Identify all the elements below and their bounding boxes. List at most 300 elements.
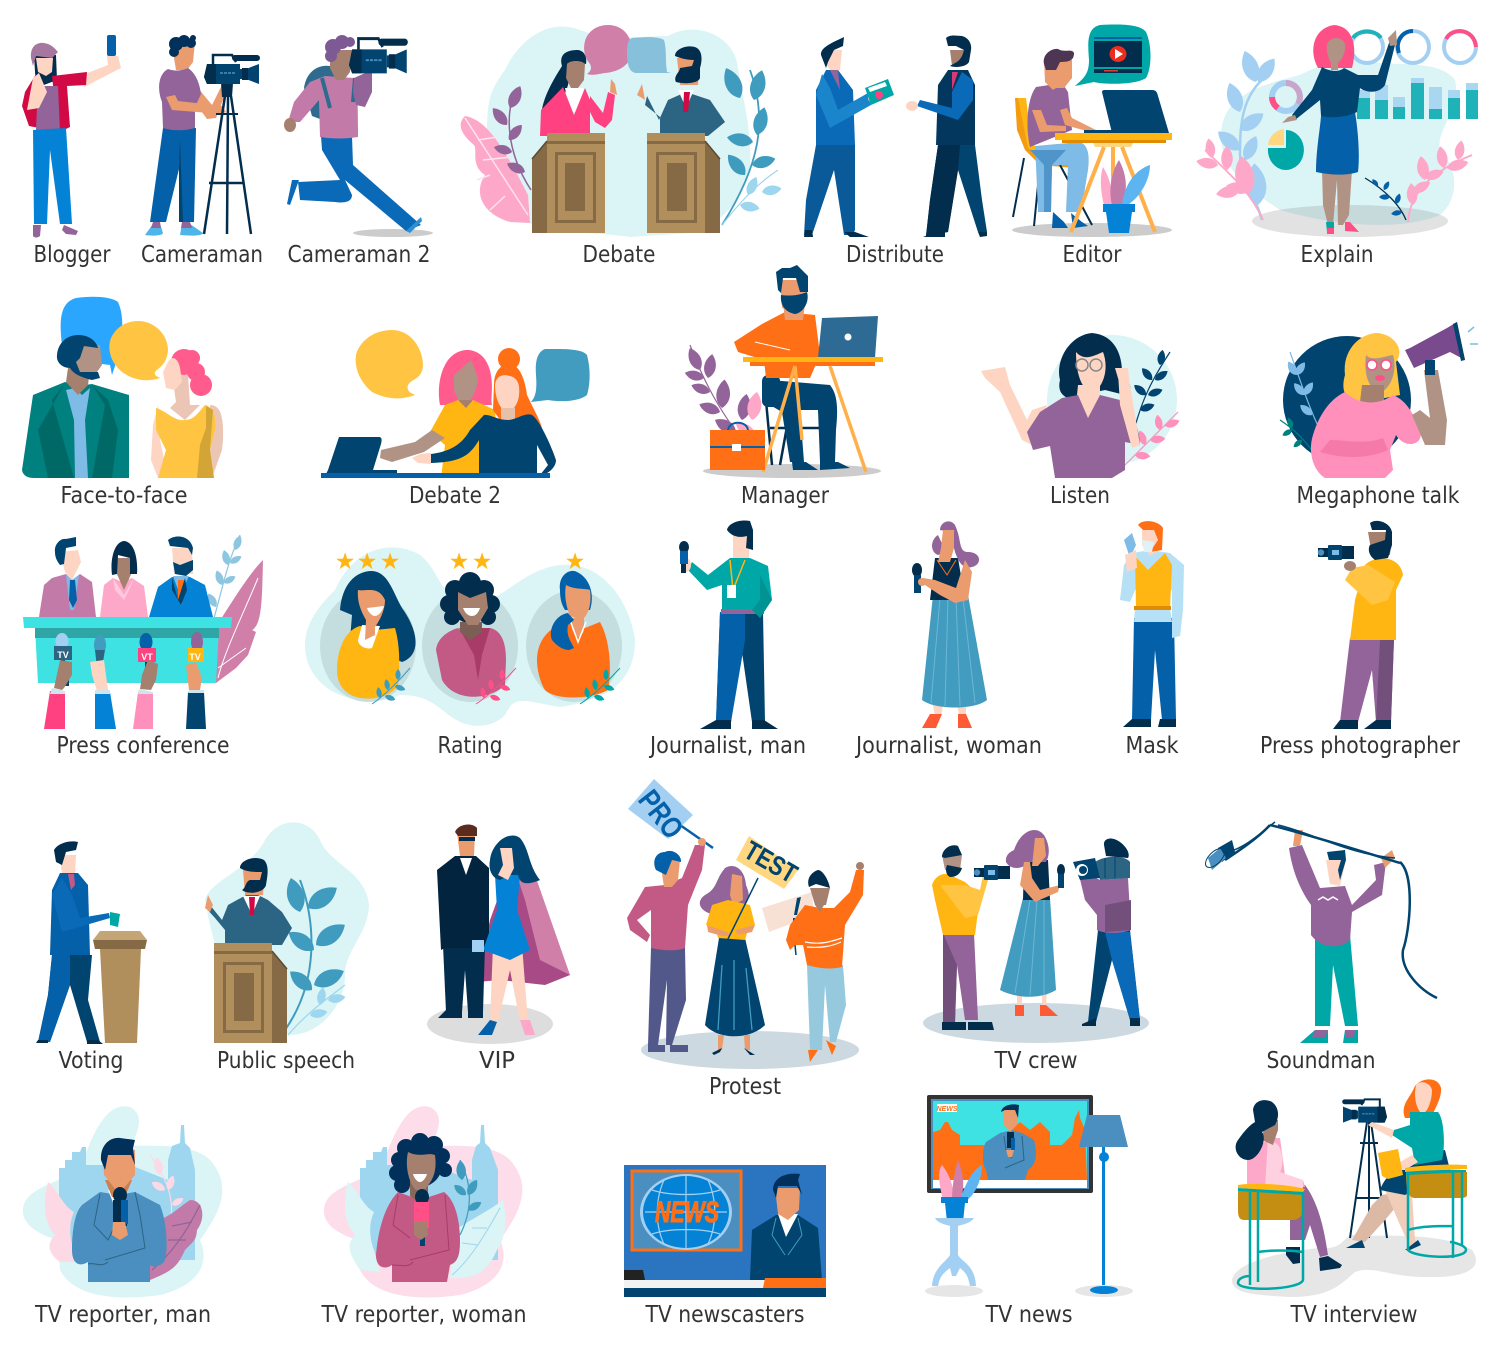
shirt bottom xyxy=(1134,608,1172,622)
navy sprig xyxy=(1365,178,1406,220)
shoes xyxy=(478,1020,497,1035)
video camera xyxy=(1073,857,1130,880)
shoes xyxy=(1052,212,1088,228)
face xyxy=(498,848,514,880)
head xyxy=(1044,60,1072,90)
woman xyxy=(100,541,148,617)
hair xyxy=(325,35,355,62)
pink sprig left xyxy=(1195,138,1263,220)
face xyxy=(1365,355,1395,392)
hair and beard xyxy=(57,335,100,380)
arms xyxy=(151,405,168,478)
label: Cameraman 2 xyxy=(288,242,430,268)
face xyxy=(1076,352,1106,392)
desk xyxy=(743,357,883,362)
raised arm xyxy=(1412,370,1447,445)
legs xyxy=(718,1035,750,1050)
mask xyxy=(1142,540,1154,552)
blob xyxy=(324,1106,522,1297)
label: Explain xyxy=(1300,242,1374,268)
bag xyxy=(472,940,484,952)
neck xyxy=(66,368,90,395)
podium right xyxy=(647,133,720,233)
man 1 pants xyxy=(804,145,855,235)
aqua circle xyxy=(1047,335,1177,465)
label: Debate xyxy=(582,242,656,268)
mic TV left: TV xyxy=(57,650,69,660)
tv frame xyxy=(927,1095,1093,1193)
sprig 2 xyxy=(476,668,516,704)
left woman head xyxy=(1262,1120,1278,1145)
jeans xyxy=(1035,142,1089,212)
floor shadow xyxy=(1232,1235,1476,1297)
boom pole xyxy=(1225,822,1437,998)
plant xyxy=(1101,167,1113,205)
panel: TV news xyxy=(925,1095,1133,1297)
shirt xyxy=(288,76,358,138)
top xyxy=(930,558,965,600)
table shadow xyxy=(925,1285,983,1297)
person 2 top xyxy=(706,900,755,940)
arm xyxy=(1020,862,1060,902)
right woman legs xyxy=(1352,1190,1410,1242)
hair xyxy=(1343,333,1400,402)
panel: Blogger xyxy=(22,35,121,238)
glasses xyxy=(1367,360,1391,370)
raised arm xyxy=(353,70,372,107)
arm to camera xyxy=(196,85,226,119)
desk xyxy=(624,1280,826,1288)
shoes xyxy=(922,714,972,728)
head xyxy=(1368,532,1392,555)
sprig 1 xyxy=(372,668,410,704)
pink hair xyxy=(439,350,492,405)
shadow xyxy=(923,1003,1149,1043)
navy top xyxy=(431,414,556,475)
skirt xyxy=(1000,898,1056,997)
man xyxy=(637,46,725,136)
belt xyxy=(1134,606,1171,610)
skirt xyxy=(922,595,987,708)
video screen xyxy=(1094,41,1142,67)
shadow xyxy=(1012,223,1172,237)
blob xyxy=(1221,60,1456,225)
raised arm xyxy=(80,56,121,87)
pink top xyxy=(1247,1138,1305,1187)
afro xyxy=(389,1133,452,1193)
arm xyxy=(52,878,110,932)
pants xyxy=(150,128,196,222)
pie chart xyxy=(1268,129,1304,170)
legs xyxy=(932,700,966,716)
lamp pole xyxy=(1102,1147,1105,1287)
person 2 hair xyxy=(700,866,749,915)
person 3 pants xyxy=(1088,930,1140,1022)
teal sprig xyxy=(283,876,350,1030)
shirt and tie xyxy=(243,896,260,915)
person 1 shirt xyxy=(627,845,705,950)
crossed arm xyxy=(1320,438,1388,457)
pants xyxy=(33,128,72,224)
woman legs xyxy=(490,945,528,1022)
forearm xyxy=(166,95,226,114)
man jacket xyxy=(437,856,489,950)
teal bubble xyxy=(531,349,590,402)
woman 3 hair xyxy=(560,571,592,610)
shirt xyxy=(1120,550,1184,638)
head xyxy=(70,345,102,372)
label: Soundman xyxy=(1266,1048,1376,1074)
shoes xyxy=(33,225,78,238)
panel: TV interview xyxy=(1232,1079,1476,1297)
woman 3 body xyxy=(537,622,610,698)
hand xyxy=(906,101,918,111)
lapel lines xyxy=(392,1195,449,1266)
face xyxy=(495,375,519,412)
label: Protest xyxy=(709,1074,781,1100)
hair xyxy=(1059,333,1131,398)
neck xyxy=(1360,385,1384,410)
stick xyxy=(680,825,713,848)
navy sprig xyxy=(1132,349,1170,440)
mic xyxy=(679,541,689,573)
label: Debate 2 xyxy=(409,483,501,509)
label: TV interview xyxy=(1290,1302,1418,1328)
sprig xyxy=(205,534,244,618)
person 3 shirt xyxy=(786,870,864,968)
mouth xyxy=(1375,375,1385,381)
label: Listen xyxy=(1050,483,1110,509)
jacket xyxy=(816,70,855,145)
hand xyxy=(205,895,213,912)
skirt xyxy=(1316,112,1359,175)
lanyard and badge xyxy=(727,560,745,598)
pants xyxy=(1132,618,1176,720)
person 1 pants xyxy=(648,948,686,1045)
city xyxy=(360,1125,498,1260)
stars: ★ xyxy=(565,549,585,575)
pot xyxy=(941,1197,968,1222)
woman top xyxy=(1023,860,1050,900)
hair xyxy=(171,349,212,396)
head xyxy=(243,870,265,895)
panel: Cameraman xyxy=(145,35,260,236)
screen xyxy=(933,1101,1087,1181)
stars: ★ xyxy=(449,549,469,575)
mic TV right xyxy=(188,632,204,662)
panel: Protest xyxy=(627,779,864,1069)
hand xyxy=(868,93,880,103)
purple sprig xyxy=(489,84,531,190)
stars: ★ xyxy=(335,549,355,575)
shadow xyxy=(1252,205,1448,237)
camera xyxy=(349,39,408,73)
shoes xyxy=(145,224,203,236)
top xyxy=(688,558,772,615)
panel: Rating xyxy=(305,547,635,726)
big leaf xyxy=(214,560,263,683)
purple sprig xyxy=(684,345,753,440)
shadow xyxy=(703,464,881,478)
right arm xyxy=(1118,372,1140,448)
man pants xyxy=(443,945,485,1012)
person 3 pants xyxy=(807,965,846,1050)
lamp shadow xyxy=(1075,1285,1133,1297)
podium xyxy=(214,943,287,1043)
plant xyxy=(939,1160,982,1202)
blob xyxy=(23,1106,222,1297)
label: Megaphone talk xyxy=(1296,483,1460,509)
shirt xyxy=(460,858,472,875)
label: Editor xyxy=(1062,242,1122,268)
shoes xyxy=(1015,1005,1058,1016)
pants xyxy=(298,136,421,231)
top xyxy=(1027,395,1140,478)
orange top xyxy=(734,312,820,378)
panel: Press photographer xyxy=(1318,521,1403,729)
bar chart xyxy=(1357,78,1478,119)
shoes xyxy=(700,720,778,729)
stick xyxy=(725,878,758,945)
face xyxy=(330,50,352,80)
head xyxy=(775,1188,800,1220)
shoes xyxy=(942,1022,994,1030)
mic xyxy=(113,1187,128,1226)
blank sign xyxy=(762,892,814,932)
desk legs xyxy=(763,366,866,472)
yellow shirt xyxy=(430,400,500,478)
jacket xyxy=(22,382,129,478)
pants xyxy=(770,380,837,462)
tie xyxy=(952,72,958,90)
pink sprig xyxy=(150,1155,185,1225)
woman 1 body xyxy=(337,626,399,699)
person 1 pants xyxy=(943,933,978,1023)
label: Voting xyxy=(58,1048,124,1074)
hand xyxy=(1344,561,1356,571)
jacket xyxy=(50,873,90,955)
desk legs xyxy=(1071,147,1155,232)
hair xyxy=(101,1138,135,1170)
microphone xyxy=(1202,840,1235,871)
panel: Distribute xyxy=(804,36,987,237)
pink leaf xyxy=(461,116,530,223)
arm xyxy=(1345,565,1395,605)
woman 1 hair xyxy=(340,571,416,662)
belt xyxy=(721,609,764,614)
blob xyxy=(305,547,635,726)
hair xyxy=(169,35,196,57)
brown arm xyxy=(380,430,445,462)
woman legs xyxy=(1017,990,1047,1008)
head xyxy=(59,855,76,873)
yellow bubble xyxy=(356,330,423,398)
face xyxy=(407,1152,436,1190)
neck xyxy=(170,375,200,420)
shoes xyxy=(1123,719,1176,727)
man 2 pants xyxy=(926,145,987,236)
shadow xyxy=(353,229,433,237)
orange city xyxy=(933,1110,1087,1180)
panel: Megaphone talk xyxy=(1280,322,1478,478)
hand xyxy=(412,453,431,464)
head xyxy=(173,42,195,70)
person 3 shirt xyxy=(1079,875,1131,933)
shoes xyxy=(1346,1240,1421,1250)
label: Rating xyxy=(438,733,502,759)
desk xyxy=(321,473,550,478)
NEWS text: NEWS xyxy=(655,1196,719,1229)
head xyxy=(942,855,962,870)
panel: Journalist, man xyxy=(679,521,778,729)
vest xyxy=(936,70,975,145)
cuffs xyxy=(50,688,204,694)
neck xyxy=(783,303,805,320)
blob xyxy=(487,26,750,237)
shirt xyxy=(778,1214,798,1237)
label: Manager xyxy=(741,483,829,509)
table shade xyxy=(35,628,219,638)
arms xyxy=(1293,830,1395,868)
sweater xyxy=(1289,845,1386,946)
ellipses xyxy=(320,590,416,702)
podium left xyxy=(532,133,605,233)
hair xyxy=(932,521,979,568)
globe xyxy=(640,1174,732,1250)
chair xyxy=(765,390,820,465)
label: Journalist, man xyxy=(648,733,806,759)
left arm xyxy=(27,73,47,110)
woman 3 ponytail xyxy=(551,613,574,650)
mic xyxy=(414,1189,429,1246)
panel: TV reporter, man xyxy=(23,1106,222,1297)
hand and mic xyxy=(912,563,926,593)
suit xyxy=(376,1192,460,1282)
woman 2 afro xyxy=(440,572,500,625)
clipboard xyxy=(1378,1149,1403,1179)
pants xyxy=(38,955,100,1042)
camera xyxy=(1318,545,1354,560)
right chair frame xyxy=(1405,1165,1467,1258)
panel: Manager xyxy=(684,265,883,478)
shirt xyxy=(159,68,201,130)
megaphone xyxy=(1405,322,1478,375)
label: Public speech xyxy=(217,1048,355,1074)
stars xyxy=(335,549,585,575)
TEST sign: TEST xyxy=(739,835,803,889)
label: Face-to-face xyxy=(60,483,188,509)
backpack xyxy=(304,66,336,122)
panel: TV reporter, woman xyxy=(324,1106,522,1297)
man 1 xyxy=(39,537,96,617)
left woman hair xyxy=(1236,1100,1278,1160)
paper xyxy=(110,912,120,927)
cable xyxy=(1400,862,1437,998)
necklace xyxy=(937,560,956,575)
label: Blogger xyxy=(34,242,111,268)
person 1 head xyxy=(660,860,680,887)
pants xyxy=(1340,638,1394,722)
panel: Editor xyxy=(1012,25,1172,237)
logo xyxy=(1318,897,1338,900)
person 2 face xyxy=(730,874,743,905)
panel: Public speech xyxy=(205,822,369,1043)
pink leaf left xyxy=(45,1182,80,1262)
shoes xyxy=(648,1045,688,1052)
briefcase xyxy=(710,423,765,470)
camera xyxy=(204,55,260,84)
donut xyxy=(1272,83,1300,111)
beard xyxy=(781,292,808,314)
side table xyxy=(932,1218,976,1286)
teal sprig xyxy=(719,65,777,225)
pants xyxy=(716,612,765,722)
shirt xyxy=(66,388,90,478)
label: TV crew xyxy=(994,1048,1078,1074)
label: Journalist, woman xyxy=(854,733,1042,759)
cape xyxy=(477,865,570,985)
shirt xyxy=(36,86,60,132)
laptop xyxy=(1102,90,1169,133)
shoes xyxy=(804,230,869,237)
pot xyxy=(1103,204,1135,233)
blue bubble xyxy=(627,37,671,73)
monitor xyxy=(624,1270,645,1280)
hood and hoodie xyxy=(1350,558,1403,640)
panel: Voting xyxy=(36,841,147,1044)
news tag: NEWS xyxy=(936,1106,958,1113)
lamp shade xyxy=(1079,1115,1128,1147)
studio wall xyxy=(624,1165,826,1297)
panel: Explain xyxy=(1195,25,1478,237)
panel: Face-to-face xyxy=(22,297,223,478)
panel: Journalist, woman xyxy=(912,521,987,728)
label: TV reporter, woman xyxy=(321,1302,526,1328)
hands xyxy=(1282,30,1397,123)
tripod xyxy=(1350,1122,1387,1238)
person 3 head xyxy=(810,888,830,912)
lamp base xyxy=(1090,1286,1118,1294)
mic xyxy=(1057,864,1065,888)
sleeves xyxy=(44,691,65,729)
person 2 skirt xyxy=(705,938,765,1036)
city xyxy=(59,1125,195,1260)
hat xyxy=(31,43,58,66)
hair xyxy=(1006,830,1049,868)
phone xyxy=(107,35,116,56)
panel: Listen xyxy=(981,333,1181,478)
head xyxy=(103,1150,135,1190)
neck and face xyxy=(1327,38,1345,70)
panel: Cameraman 2 xyxy=(284,35,433,237)
right arm xyxy=(1368,1122,1394,1138)
suit xyxy=(750,1215,822,1280)
lapel lines xyxy=(88,1192,145,1265)
orange hair xyxy=(1404,1079,1441,1118)
hand xyxy=(698,838,706,846)
woman 3 face xyxy=(565,585,591,620)
pink sprig xyxy=(1122,412,1181,468)
panel: TV crew xyxy=(923,830,1149,1043)
head xyxy=(457,833,475,856)
teal sprig xyxy=(1280,417,1315,455)
purple leaf xyxy=(150,1200,202,1280)
shirt xyxy=(108,1190,128,1215)
top xyxy=(1292,40,1395,120)
socks and shoes xyxy=(1286,1247,1342,1271)
reporter xyxy=(983,1104,1036,1180)
tie xyxy=(68,874,75,890)
